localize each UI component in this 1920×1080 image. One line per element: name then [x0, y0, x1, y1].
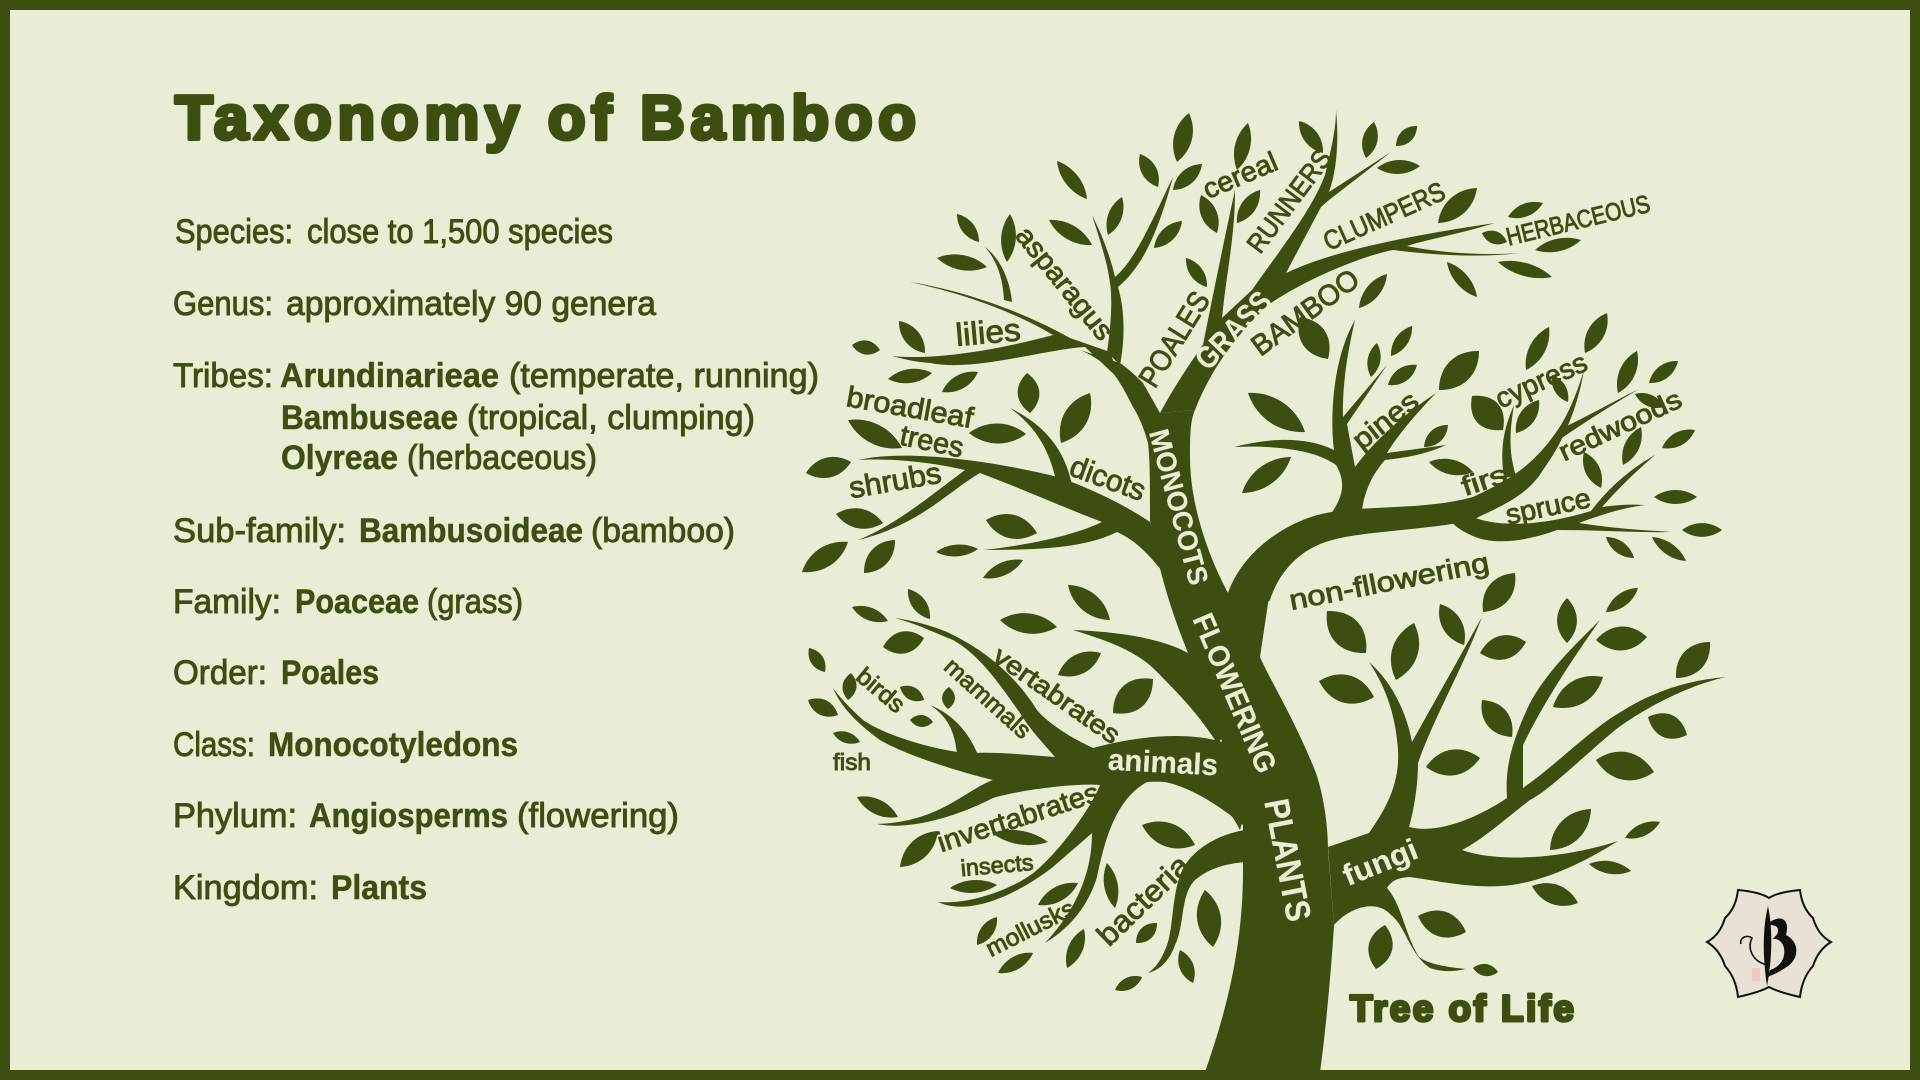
- label: trees: trees: [897, 420, 966, 464]
- label: fish: fish: [833, 749, 871, 775]
- row: phylum: [173, 797, 679, 835]
- label: firs: firs: [1458, 459, 1511, 502]
- label: monocots: MONOCOTS: [1143, 426, 1214, 588]
- label: pines: pines: [1346, 385, 1424, 456]
- row: tribes: Bambuseae: [281, 399, 458, 437]
- label: flowering: FLOWERING: [1186, 609, 1282, 778]
- label: broadleaf: broadleaf: [844, 381, 977, 435]
- tree labels: [833, 144, 1686, 963]
- label: plants: PLANTS: [1256, 796, 1318, 925]
- label: grass: GRASS: [1188, 284, 1279, 377]
- label: fungi: fungi: [1338, 833, 1423, 893]
- row: phylum: Angiosperms: [309, 797, 508, 835]
- row: kingdom: Plants: [331, 869, 427, 907]
- row: order: Poales: [281, 654, 379, 692]
- row: phylum: Phylum:: [173, 797, 297, 835]
- tree of life caption: Tree of Life: [1350, 988, 1574, 1029]
- label: cypress: cypress: [1491, 346, 1592, 414]
- label: dicots: dicots: [1065, 450, 1150, 508]
- row: kingdom: Kingdom:: [173, 869, 318, 907]
- label: shrubs: shrubs: [847, 457, 944, 505]
- label: insects: insects: [960, 849, 1034, 881]
- label: birds: birds: [851, 663, 910, 719]
- row: family: (grass): [427, 583, 523, 621]
- row: species: Species:: [175, 213, 293, 251]
- row: class: Monocotyledons: [268, 726, 518, 764]
- row: species: [175, 213, 613, 251]
- label: mammals: mammals: [939, 653, 1036, 744]
- row: tribes: Olyreae: [281, 439, 398, 477]
- row: class: Class:: [173, 726, 255, 764]
- label: poales: POALES: [1133, 286, 1217, 393]
- label: herbaceous: HERBACEOUS: [1503, 190, 1653, 252]
- row: tribes: (temperate, running): [509, 357, 819, 395]
- row: kingdom: [173, 869, 427, 907]
- label: invertabrates: invertabrates: [933, 777, 1103, 858]
- tree leaves: [797, 111, 1722, 995]
- row: species: close to 1,500 species: [307, 213, 613, 251]
- label: runners: RUNNERS: [1241, 144, 1338, 259]
- label: spruce: spruce: [1503, 482, 1593, 530]
- label: asparagus: asparagus: [1010, 220, 1120, 346]
- label: clumpers: CLUMPERS: [1319, 176, 1450, 257]
- label: vertabrates: vertabrates: [988, 640, 1126, 750]
- label: bamboo: BAMBOO: [1246, 263, 1366, 363]
- label: lilies: lilies: [954, 311, 1022, 353]
- row: tribes: (herbaceous): [407, 439, 597, 477]
- row: tribes: [173, 357, 819, 477]
- row: genus: Genus:: [173, 285, 273, 323]
- taxonomy list: [173, 213, 819, 907]
- tree trunk and branches: [833, 110, 1726, 1072]
- row: tribes: Tribes:: [173, 357, 273, 395]
- row: tribes: (tropical, clumping): [467, 399, 755, 437]
- label: bacteria: bacteria: [1091, 849, 1197, 953]
- row: sub-family: Bambusoideae: [359, 512, 583, 550]
- logo: lotus badge with B: [1707, 890, 1831, 997]
- label: animals: animals: [1107, 744, 1219, 782]
- row: phylum: (flowering): [517, 797, 679, 835]
- row: family: [173, 583, 523, 621]
- title: Taxonomy of Bamboo: [175, 84, 916, 153]
- row: class: [173, 726, 518, 764]
- row: order: Order:: [173, 654, 267, 692]
- row: tribes: Arundinarieae: [280, 357, 499, 395]
- row: family: Poaceae: [295, 583, 419, 621]
- row: sub-family: Sub-family:: [173, 512, 346, 550]
- row: order: [173, 654, 379, 692]
- label: redwoods: redwoods: [1554, 384, 1686, 467]
- row: family: Family:: [173, 583, 281, 621]
- row: sub-family: [173, 512, 735, 550]
- label: cereal: cereal: [1198, 146, 1282, 205]
- row: sub-family: (bamboo): [591, 512, 735, 550]
- row: genus: approximately 90 genera: [286, 285, 656, 323]
- label: non-flowering: non-fllowering: [1286, 547, 1492, 616]
- tree of life illustration: [797, 110, 1726, 1072]
- label: mollusks: mollusks: [982, 895, 1079, 963]
